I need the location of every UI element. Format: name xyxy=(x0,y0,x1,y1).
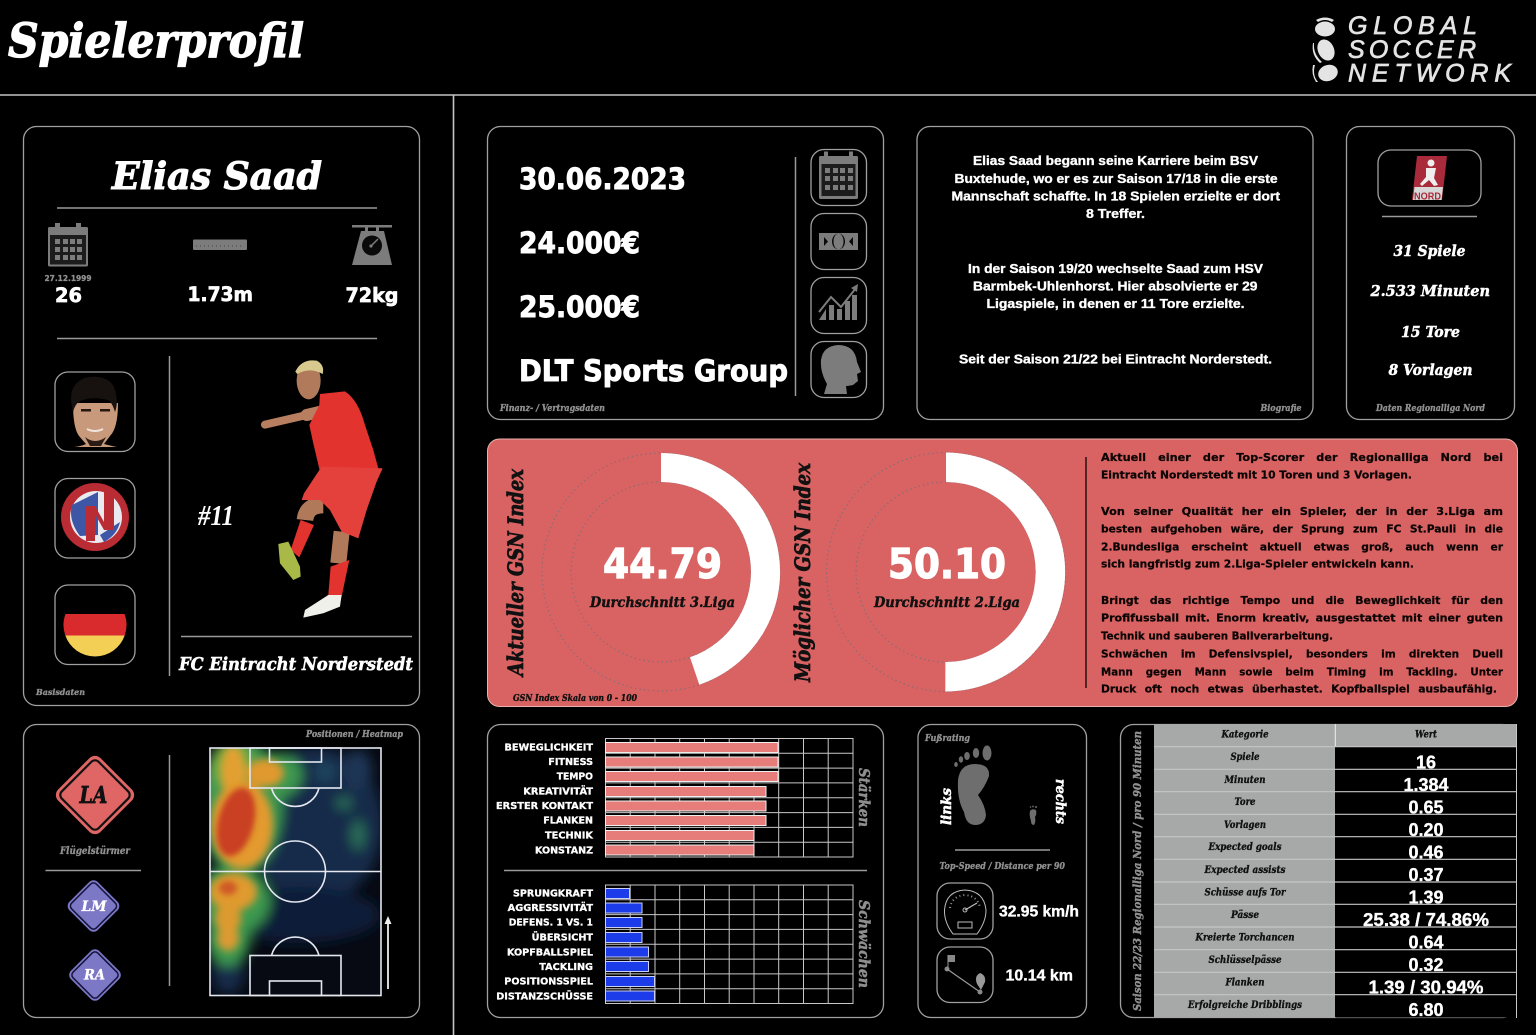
weight: 72kg xyxy=(346,284,398,307)
icon: ruler xyxy=(193,240,247,250)
biography text: 8 Treffer. xyxy=(1086,207,1145,221)
table: 16 xyxy=(1416,752,1436,772)
logo: Global Soccer Network: SOCCER xyxy=(1348,36,1476,64)
table: Erfolgreiche Dribblings xyxy=(1187,1000,1302,1011)
assessment text: Technik und sauberen Ballverarbeitung. xyxy=(1101,630,1333,642)
panel: GSN Index xyxy=(488,439,1518,706)
main position label: Flügelstürmer xyxy=(59,846,131,857)
bar chart: strengths: FITNESS xyxy=(548,757,593,768)
heading: Schwächen: Schwächen xyxy=(855,900,873,988)
table: 1.39 xyxy=(1408,888,1444,908)
caption: Fußrating: Fußrating xyxy=(924,734,970,744)
panel: Daten Regionalliga Nord xyxy=(1346,126,1514,420)
panel: Saison stats table xyxy=(1120,724,1516,1020)
bar chart: weaknesses: KOPFBALLSPIEL xyxy=(507,947,593,958)
bar chart: weaknesses xyxy=(496,885,853,1004)
assessment text: besten aufgehoben wäre, der Sprung zum FC St.Pauli in die xyxy=(1101,522,1503,536)
panel: Basisdaten xyxy=(24,126,420,706)
icon: left foot rating xyxy=(954,746,992,825)
photo: player kicking xyxy=(265,360,383,618)
table: 0.46 xyxy=(1408,842,1444,862)
donut: current index xyxy=(542,453,780,691)
table: Expected assists xyxy=(1204,865,1286,876)
caption: Positionen / Heatmap: Positionen / Heatmap xyxy=(305,730,404,740)
stat: goals: 15 Tore xyxy=(1401,323,1460,341)
position badge: LA xyxy=(53,753,137,837)
position badge: RA xyxy=(67,947,123,1003)
table: Spiele xyxy=(1230,752,1260,763)
position badge: LM xyxy=(65,878,122,934)
biography text xyxy=(952,154,1281,366)
position badge: LM: LM xyxy=(81,899,107,915)
table: Kreierte Torchancen xyxy=(1195,932,1294,944)
table: Schüsse aufs Tor xyxy=(1204,888,1286,898)
bar chart: weaknesses: AGGRESSIVITÄT xyxy=(508,903,594,914)
player name: Elias Saad xyxy=(111,154,322,198)
donut: potential index xyxy=(826,452,1066,692)
donut: potential index: 50.10 xyxy=(888,540,1006,588)
donut: potential index: Durchschnitt 2.Liga xyxy=(873,595,1020,611)
table: Wert xyxy=(1415,730,1437,740)
icon: scale xyxy=(352,225,392,265)
label: rechts: rechts xyxy=(1052,779,1068,824)
photo: player portrait xyxy=(55,372,135,452)
bar chart: weaknesses: DEFENS. 1 VS. 1 xyxy=(509,918,593,929)
heading: season table label: Saison 22/23 Regionalliga Nord / pro 90 Minuten xyxy=(1131,731,1144,1011)
position badge: RA: RA xyxy=(83,968,105,984)
assessment text: Eintracht Norderstedt mit 10 Toren und 3 Vorlagen. xyxy=(1101,468,1412,482)
caption: Basisdaten: Basisdaten xyxy=(35,688,85,698)
assessment text: 2.Bundesliga erscheint aktuell etwas groß, auch wenn er xyxy=(1101,540,1504,554)
height: 1.73m xyxy=(188,283,253,306)
bar chart: strengths: TECHNIK xyxy=(545,831,594,842)
biography text: Ligaspiele, in denen er 11 Tore erzielte. xyxy=(986,297,1244,311)
logo: Global Soccer Network xyxy=(1312,12,1512,88)
market value: 25.000€ xyxy=(519,290,640,324)
table: 0.32 xyxy=(1408,955,1444,975)
table: 6.80 xyxy=(1408,1000,1444,1020)
position badge: LA: LA xyxy=(79,782,108,809)
table: Pässe xyxy=(1230,910,1259,921)
icon: banknote xyxy=(811,214,866,270)
icon: speedometer xyxy=(937,883,993,939)
biography text: Seit der Saison 21/22 bei Eintracht Norderstedt. xyxy=(959,352,1272,366)
assessment text: Von seiner Qualität her ein Spieler, der in der 3.Liga am xyxy=(1101,505,1503,518)
stat: games: 31 Spiele xyxy=(1394,242,1466,260)
table: 0.20 xyxy=(1408,820,1444,840)
shirt number: #11 xyxy=(197,500,234,532)
bar chart: weaknesses: DISTANZSCHÜSSE xyxy=(496,992,593,1003)
icon: right foot rating xyxy=(1030,806,1037,825)
caption: Biografie: Biografie xyxy=(1260,404,1302,414)
icon: calendar xyxy=(811,150,866,206)
table: 1.384 xyxy=(1403,775,1449,795)
biography text: Barmbek-Uhlenhorst. Hier absolvierte er 29 xyxy=(973,280,1258,294)
caption: Finanz- / Vertragsdaten: Finanz- / Vertragsdaten xyxy=(499,404,605,414)
bar chart: strengths: FLANKEN xyxy=(543,816,593,827)
bar chart: weaknesses: SPRUNGKRAFT xyxy=(513,888,594,899)
bar chart: weaknesses: POSITIONSSPIEL xyxy=(504,977,593,988)
heading: Möglicher GSN Index: Möglicher GSN Index xyxy=(790,463,815,683)
assessment text: Aktuell einer der Top-Scorer der Regionalliga Nord bei xyxy=(1101,451,1503,464)
arrow: attacking direction xyxy=(384,916,392,989)
table: 1.39 / 30.94% xyxy=(1368,978,1484,998)
assessment text: Mann gegen Mann sowie beim Timing im Tackling. Unter xyxy=(1101,666,1504,678)
birthdate: 27.12.1999 xyxy=(44,274,92,283)
agency: DLT Sports Group xyxy=(519,354,788,388)
caption: Daten Regionalliga Nord: Daten Regionalliga Nord xyxy=(1375,404,1486,414)
table: 25.38 / 74.86% xyxy=(1363,910,1489,930)
panel: Positionen / Heatmap xyxy=(24,724,420,1018)
stat: top speed: 32.95 km/h xyxy=(999,904,1079,920)
bar chart: weaknesses: TACKLING xyxy=(539,962,593,973)
panel: Stärken / Schwächen xyxy=(488,724,884,1018)
salary: 24.000€ xyxy=(519,226,640,260)
biography text: In der Saison 19/20 wechselte Saad zum HSV xyxy=(968,262,1264,276)
table: Expected goals xyxy=(1208,842,1282,853)
table: Schlüsselpässe xyxy=(1208,955,1282,966)
table: Minuten xyxy=(1224,775,1266,786)
icon: Regionalliga Nord logo xyxy=(1378,150,1481,206)
biography text: Mannschaft schaffte. In 18 Spielen erzielte er dort xyxy=(952,190,1281,204)
table: Flanken xyxy=(1225,978,1264,988)
assessment text: sich langfristig zum 2.Liga-Spieler entwickeln kann. xyxy=(1101,558,1414,570)
caption: Top-Speed / Distance: Top-Speed / Distance per 90 xyxy=(940,861,1065,872)
table: Tore xyxy=(1234,797,1256,808)
heatmap pitch xyxy=(209,747,382,996)
bar chart: strengths: BEWEGLICHKEIT xyxy=(504,742,594,753)
stat: distance: 10.14 km xyxy=(1006,968,1073,984)
assessment text xyxy=(1101,451,1504,696)
table: 0.37 xyxy=(1408,865,1444,885)
assessment text: Schwächen im Defensivspiel, besonders im direkten Duell xyxy=(1101,648,1503,660)
logo: Global Soccer Network: NETWORK xyxy=(1348,60,1512,88)
donut: current index: 44.79 xyxy=(603,540,722,588)
table xyxy=(1154,724,1516,1020)
bar chart: strengths xyxy=(496,738,853,857)
table: 0.64 xyxy=(1408,932,1444,952)
club name: FC Eintracht Norderstedt xyxy=(178,654,414,675)
icon: club badge xyxy=(55,478,135,558)
heading: Aktueller GSN Index: Aktueller GSN Index xyxy=(503,469,528,678)
icon: growth chart xyxy=(811,278,866,334)
icon: distance route xyxy=(937,947,993,1002)
assessment text: Profifussball mit. Enorm kreativ, ausgestattet mit einer guten xyxy=(1101,612,1503,624)
logo: Global Soccer Network: GLOBAL xyxy=(1348,12,1477,40)
caption: scale note: GSN Index Skala von 0 - 100 xyxy=(513,694,638,704)
donut: current index: Durchschnitt 3.Liga xyxy=(589,595,735,611)
panel: Finanz- / Vertragsdaten xyxy=(488,126,884,420)
table: Kategorie xyxy=(1221,730,1268,740)
table: Vorlagen xyxy=(1224,820,1266,831)
biography text: Buxtehude, wo er es zur Saison 17/18 in die erste xyxy=(954,172,1278,186)
bar chart: strengths: KONSTANZ xyxy=(535,845,593,856)
panel: Fußrating / Speed xyxy=(918,724,1086,1018)
bar chart: weaknesses: ÜBERSICHT xyxy=(532,932,594,943)
label: links: links xyxy=(939,788,955,825)
age: 26 xyxy=(55,284,82,307)
assessment text: Druck oft noch etwas überhastet. Kopfballspiel ausbaufähig. xyxy=(1101,682,1497,696)
icon: German flag xyxy=(55,585,135,664)
bar chart: strengths: ERSTER KONTAKT xyxy=(496,801,594,812)
heading: Stärken: Stärken xyxy=(855,768,873,827)
bar chart: strengths: KREATIVITÄT xyxy=(523,786,594,797)
table: 0.65 xyxy=(1408,798,1444,818)
stat: minutes: 2.533 Minuten xyxy=(1370,282,1490,300)
biography text: Elias Saad begann seine Karriere beim BSV xyxy=(973,154,1259,168)
icon: agent head xyxy=(811,342,866,398)
contract end: 30.06.2023 xyxy=(519,162,686,196)
icon: Regionalliga Nord logo: NORD xyxy=(1414,192,1441,202)
icon: calendar birthdate xyxy=(48,223,88,266)
panel: Biografie xyxy=(917,126,1313,420)
assessment text: Bringt das richtige Tempo und die Beweglichkeit für den xyxy=(1101,594,1503,607)
bar chart: strengths: TEMPO xyxy=(557,772,593,783)
title: Spielerprofil xyxy=(8,14,304,69)
stat: assists: 8 Vorlagen xyxy=(1388,361,1472,379)
